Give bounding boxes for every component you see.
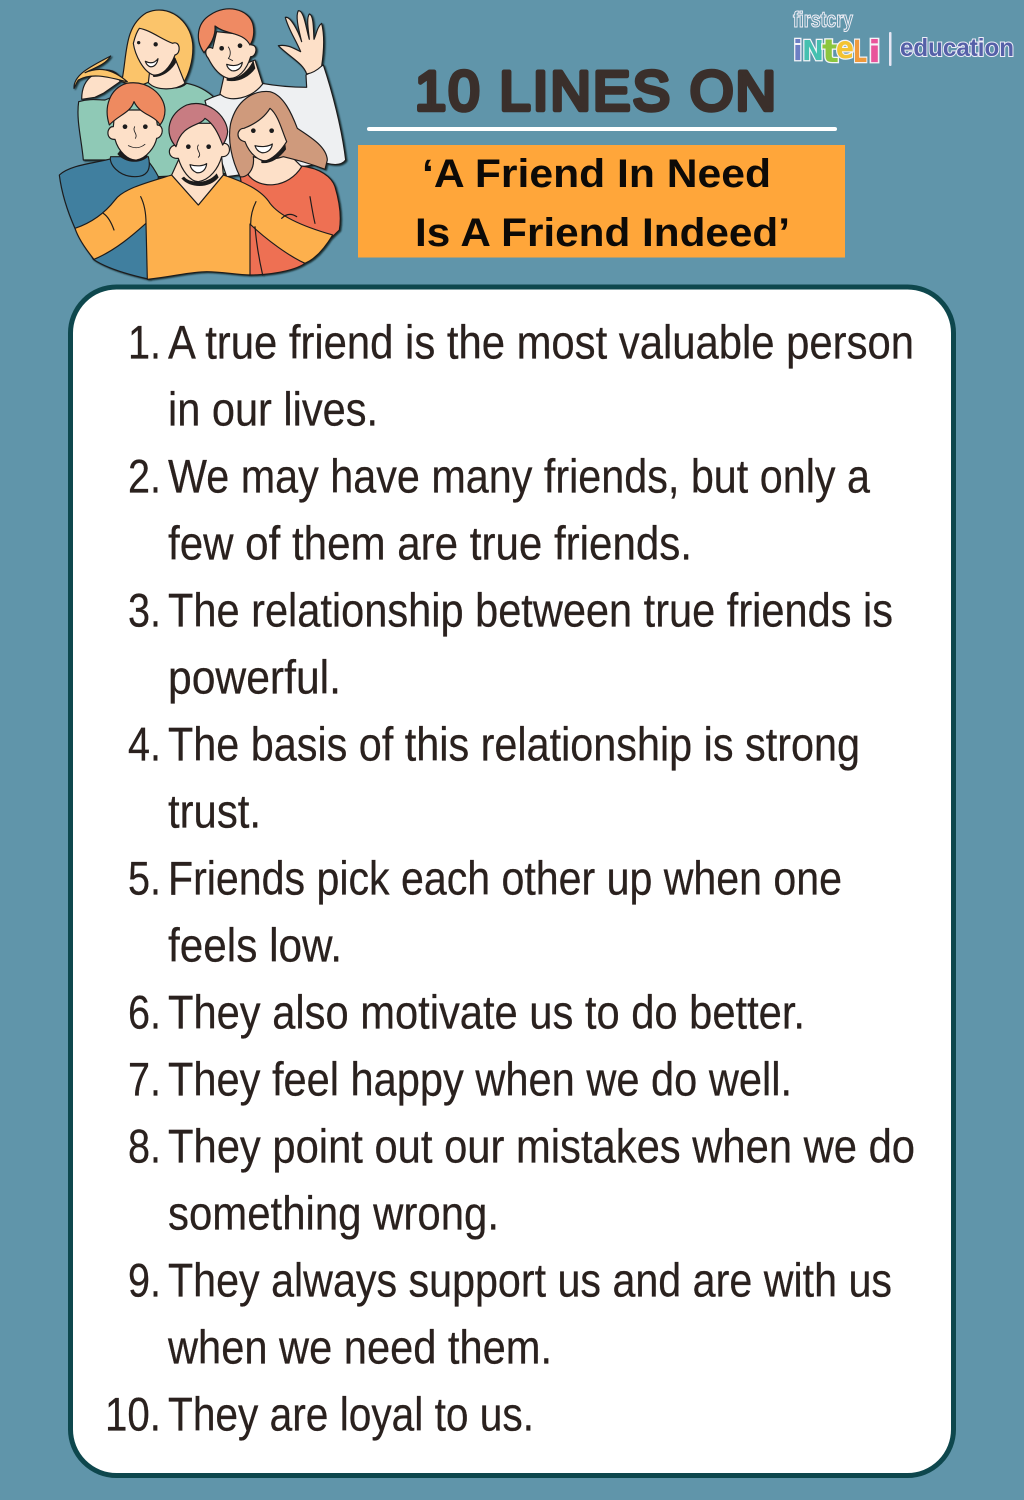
waving man bbox=[198, 9, 346, 177]
logo text: intelli: L bbox=[853, 35, 867, 70]
line 3: The relationship between true friends is bbox=[168, 584, 893, 636]
line 3: powerful. bbox=[168, 650, 341, 704]
title: 10 LINES ON bbox=[415, 59, 776, 122]
logo text: intelli: N bbox=[802, 34, 824, 67]
line 8: 8. bbox=[128, 1120, 161, 1172]
line 3: 3. bbox=[128, 584, 161, 636]
subtitle banner: ‘A Friend In Need bbox=[422, 152, 771, 196]
line 6: 6. bbox=[128, 986, 161, 1038]
line 9: They always support us and are with us bbox=[168, 1254, 892, 1306]
boy in blue sweater bbox=[59, 83, 165, 279]
line 9 bbox=[128, 1254, 892, 1374]
logo text: intelli: e bbox=[836, 31, 854, 66]
logo text: intelli: i bbox=[868, 35, 881, 70]
line 8: something wrong. bbox=[168, 1186, 499, 1240]
title underline bbox=[367, 127, 837, 131]
line 5: 5. bbox=[128, 852, 161, 904]
logo text: firstcry: firstcry bbox=[793, 7, 854, 32]
line 8 bbox=[128, 1120, 915, 1240]
line 7: They feel happy when we do well. bbox=[168, 1052, 792, 1106]
line 3 bbox=[128, 584, 893, 704]
line 1 bbox=[128, 316, 914, 436]
logo text: intelli bbox=[793, 31, 881, 70]
line 2: few of them are true friends. bbox=[168, 516, 692, 570]
line 2 bbox=[128, 450, 871, 570]
line 4 bbox=[128, 718, 860, 838]
line 10: 10. bbox=[105, 1388, 161, 1440]
line 4: trust. bbox=[168, 784, 261, 838]
woman in red top bbox=[230, 91, 340, 275]
panel: ten lines list bbox=[70, 287, 954, 1476]
line 2: 2. bbox=[128, 450, 161, 502]
man in yellow sweater bbox=[75, 103, 333, 279]
blonde woman bbox=[74, 10, 230, 177]
logo text: intelli: i bbox=[793, 34, 803, 67]
line 6: They also motivate us to do better. bbox=[168, 986, 805, 1038]
line 8: They point out our mistakes when we do bbox=[168, 1120, 915, 1172]
logo text: education: education bbox=[900, 34, 1014, 62]
line 2: We may have many friends, but only a bbox=[168, 450, 871, 502]
logo divider bbox=[889, 32, 892, 66]
line 1: A true friend is the most valuable person bbox=[168, 316, 914, 368]
line 9: when we need them. bbox=[167, 1320, 552, 1374]
line 4: The basis of this relationship is strong bbox=[168, 718, 860, 770]
illustration: group of friends bbox=[59, 9, 346, 279]
line 9: 9. bbox=[128, 1254, 161, 1306]
line 5 bbox=[128, 852, 842, 972]
line 10: They are loyal to us. bbox=[168, 1388, 534, 1440]
line 7: 7. bbox=[128, 1052, 161, 1106]
logo text: intelli: t bbox=[822, 32, 839, 70]
line 5: Friends pick each other up when one bbox=[168, 852, 842, 904]
subtitle banner bbox=[358, 145, 845, 258]
line 4: 4. bbox=[128, 718, 161, 770]
line 1: 1. bbox=[128, 316, 161, 368]
line 5: feels low. bbox=[168, 918, 342, 972]
subtitle banner: Is A Friend Indeed’ bbox=[415, 211, 790, 255]
line 1: in our lives. bbox=[168, 382, 378, 436]
logo: firstcry intelli education bbox=[793, 7, 1014, 70]
